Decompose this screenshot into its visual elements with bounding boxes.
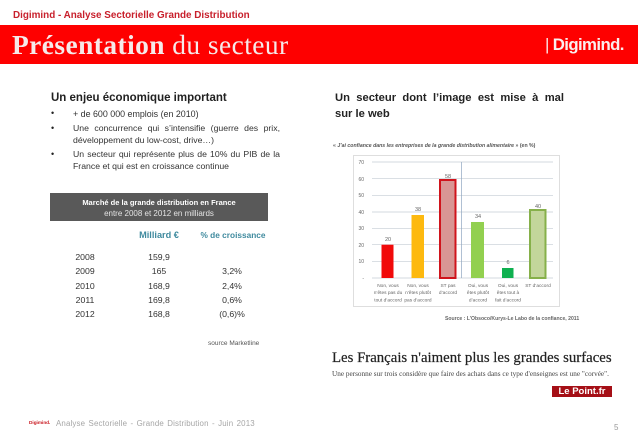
- red title banner: [0, 25, 638, 64]
- bullet list: Un secteur qui représente plus de 10% du PIB de la France et qui est en croissance continue: [73, 149, 280, 171]
- table: market data: 169,8: [148, 295, 170, 305]
- table: market data: [75, 230, 266, 319]
- table: market data: 168,8: [148, 309, 170, 319]
- bar value labels: 40: [535, 204, 541, 210]
- category labels: Non, vous: [377, 283, 399, 289]
- panel: left heading: Un enjeu économique important: [51, 92, 227, 104]
- table: market data: 2009: [75, 266, 95, 276]
- bullet list: •: [51, 149, 54, 159]
- table source: source Marketline: [208, 340, 259, 347]
- table: market data: 168,9: [148, 281, 170, 291]
- table: market data: 165: [152, 266, 166, 276]
- chart title: « J’ai confiance dans les entreprises de la grande distribution alimentaire » (en %): [333, 143, 535, 149]
- y axis labels: 20: [358, 243, 364, 249]
- bar value labels: 20: [385, 237, 391, 243]
- y axis labels: 60: [358, 177, 364, 183]
- category labels: n’êtes plutôt: [405, 290, 432, 296]
- category labels: tout d’accord: [374, 298, 402, 304]
- bar value labels: 6: [506, 260, 510, 266]
- category labels: fait d’accord: [495, 298, 521, 304]
- category labels: Non, vous: [407, 283, 429, 289]
- table: market data: % de croissance: [200, 230, 266, 240]
- category labels: ST d’accord: [525, 283, 551, 289]
- top header label: Digimind - Analyse Sectorielle Grande Distribution: [13, 10, 250, 21]
- y axis labels: 10: [358, 259, 364, 265]
- category labels: ST pas: [440, 283, 456, 289]
- table: market data: 2011: [76, 295, 94, 305]
- category labels: d’accord: [439, 290, 457, 296]
- table header band: entre 2008 et 2012 en milliards: [104, 209, 214, 218]
- bar value labels: [385, 174, 541, 266]
- table: market data: 2010: [75, 281, 95, 291]
- y axis labels: -: [362, 276, 364, 282]
- panel: right heading: [335, 92, 564, 120]
- bullet list: + de 600 000 emplois (en 2010): [73, 109, 199, 119]
- press headline: Les Français n'aiment plus les grandes surfaces: [332, 350, 612, 366]
- table: market data: 159,9: [148, 252, 170, 262]
- table header band: Marché de la grande distribution en France: [82, 198, 236, 207]
- y axis labels: 40: [358, 210, 364, 216]
- table: market data: 2,4%: [222, 281, 242, 291]
- y axis labels: 30: [358, 226, 364, 232]
- table: market data: 3,2%: [222, 266, 242, 276]
- bullet list: •: [51, 108, 54, 118]
- category labels: pas d’accord: [404, 298, 432, 304]
- chart source: Source : L’Obsoco/Kurys-Le Labo de la confiance, 2011: [445, 316, 579, 322]
- table: market data: 0,6%: [222, 295, 242, 305]
- category labels: êtes tout à: [497, 290, 520, 296]
- table: market data: Milliard €: [139, 230, 179, 240]
- category labels: Oui, vous: [498, 283, 519, 289]
- panel: right heading: Un secteur dont l’image est mise à mal: [335, 92, 564, 104]
- logo: Le Point.fr: Le Point.fr: [558, 386, 605, 397]
- bar value labels: 34: [475, 214, 481, 220]
- title: Présentation du secteur: [12, 30, 289, 60]
- page number: 5: [614, 423, 618, 432]
- category labels: êtes plutôt: [467, 290, 490, 296]
- table: market data: 2008: [75, 252, 95, 262]
- category labels: Oui, vous: [468, 283, 489, 289]
- bullet list: •: [51, 123, 54, 133]
- y axis labels: 70: [358, 160, 364, 166]
- table: market data: 2012: [75, 309, 95, 319]
- category labels: d’accord: [469, 298, 487, 304]
- bullet list: Une concurrence qui s’intensifie (guerre des prix, développement du low-cost, drive…): [73, 123, 280, 145]
- bar value labels: 58: [445, 174, 451, 180]
- category labels: n’êtes pas du: [374, 290, 403, 296]
- panel: right heading: sur le web: [335, 108, 390, 120]
- press subheading: Une personne sur trois considère que faire des achats dans ce type d'enseignes est une "corvée".: [332, 370, 609, 378]
- category labels: [374, 283, 551, 304]
- y axis labels: [358, 160, 364, 282]
- bars: [382, 180, 546, 278]
- table: market data: (0,6)%: [219, 309, 245, 319]
- bullet list: [51, 108, 280, 171]
- logo: Digimind: |Digimind.: [545, 35, 624, 54]
- y axis labels: 50: [358, 193, 364, 199]
- bar chart: [353, 155, 560, 307]
- table header band: [50, 193, 268, 221]
- bar value labels: 38: [415, 207, 421, 213]
- footer logo: Digimind.: [29, 420, 50, 425]
- footer text: Analyse Sectorielle - Grande Distribution - Juin 2013: [56, 419, 255, 428]
